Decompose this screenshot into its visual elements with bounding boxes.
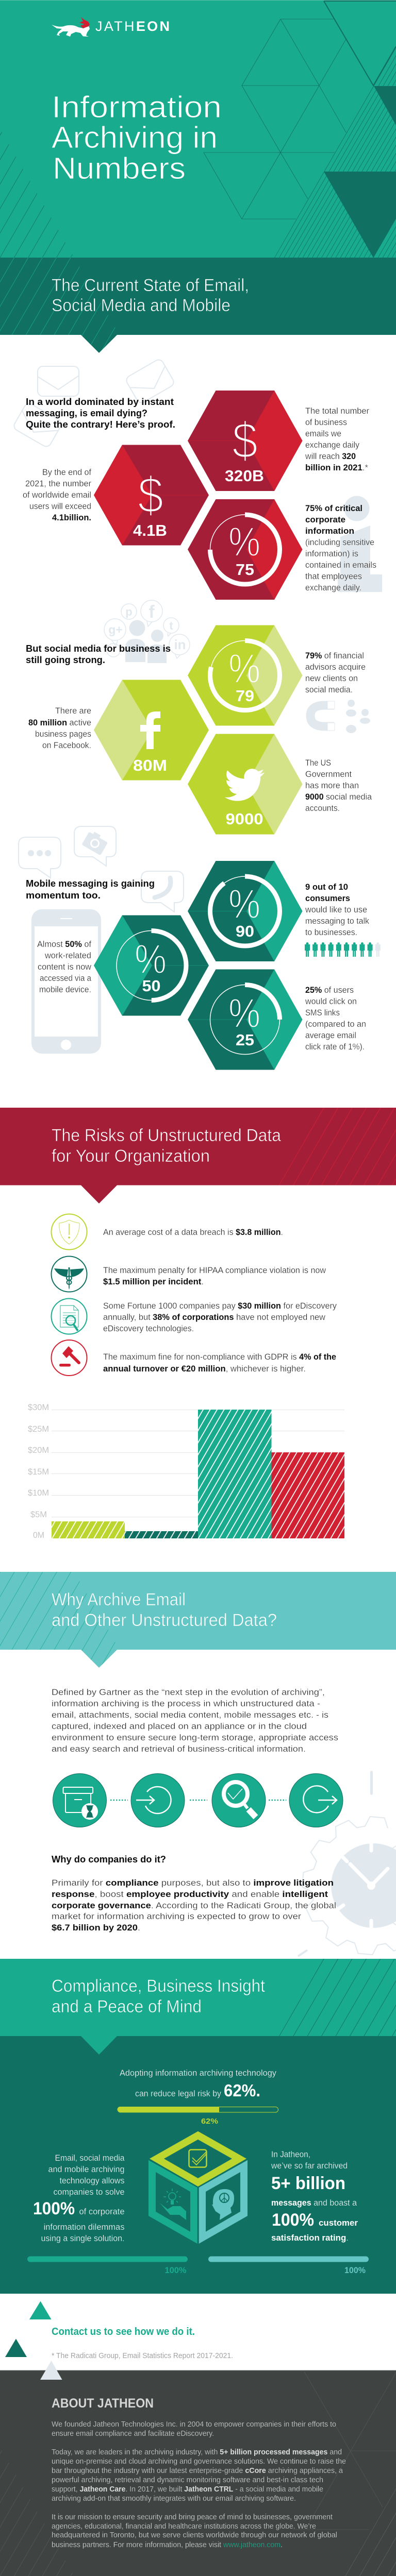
text: 5+ billion: we’ve so far archived [271,2161,348,2171]
chart axis labels: $10M [28,1488,49,1498]
footer text: ensure email compliance and facilitate eDiscovery. [52,2430,214,2438]
text: 100 percent corporate: Email, social media [55,2154,125,2163]
text: 4.1 billion: By the end of [42,468,91,477]
text: GDPR: The maximum fine for non-compliance with GDPR is 4% of the [103,1352,336,1362]
heading: email: messaging, is email dying? [26,408,147,418]
text: legal risk: Adopting information archiving technology [120,2069,277,2078]
text: 9000 accounts: accounts. [305,804,340,813]
text: 50 percent: accessed via a [40,974,92,983]
hexagon: 50 percent: 50 [142,977,161,995]
title: Numbers [53,151,186,185]
hexagon: 80M [94,680,209,780]
text: 9000 accounts: Government [305,770,352,779]
progress bar: right 100 percent [208,2257,369,2275]
background icons: social people: g+ [108,623,123,636]
text: 4.1 billion: 4.1billion. [52,513,91,522]
background icon: magnet and people [310,700,370,733]
text: 9000 accounts: 9000 social media [305,792,372,802]
bar: HIPAA [125,1531,198,1538]
text: 50 percent [37,940,92,994]
text: 75 percent: information) is [305,549,358,558]
section heading: current state: The Current State of Email, [52,276,249,295]
logo: JATHEON [95,19,170,34]
text: 80 million: 80 million active [28,718,91,727]
title: Archiving in [52,121,218,155]
text: 80 million: business pages [35,730,91,739]
text: definition: environment to ensure secure long-term storage, appropriate access [52,1733,338,1742]
footer heading: ABOUT JATHEON [52,2396,154,2411]
text: 4.1 billion [23,468,91,522]
text: why do companies: market for information archiving is expected to grow to over [52,1912,302,1921]
text: 50 percent: work-related [44,951,91,960]
background icons: social people [104,600,190,663]
icon: phone with text [31,909,101,1054]
section heading: compliance [52,1976,266,2016]
text: why do companies: response , boost employee productivity and enable intelligent [52,1890,328,1899]
text: 50 percent: content is now [38,962,91,972]
text: 79 percent [305,651,366,694]
text: 9 out of 10 [305,883,370,937]
icon: cube [148,2131,248,2244]
text: 25 percent: would click on [305,997,357,1006]
text: 75 percent: 75% of critical [305,504,362,513]
progress bar: left 100 percent [27,2257,188,2275]
text: 9 out of 10: would like to use [305,905,367,914]
bar chart [28,1402,344,1540]
hexagon: 79 percent [188,625,302,725]
text: why do companies: Why do companies do it? [52,1854,166,1865]
heading: social: still going strong. [26,655,105,665]
text: 9000 accounts: The US [305,758,331,768]
text: 25 percent [305,986,366,1052]
text: 80 million: There are [55,706,91,716]
icon: archive box [53,1773,106,1827]
icon: magnifier check [212,1773,266,1827]
text: why do companies [52,1854,336,1933]
footer text: support, Jatheon Care. In 2017, we built Jatheon CTRL - a social media and mobile [52,2485,323,2494]
logo [52,17,170,37]
background icons: social people: f [148,602,155,622]
footer panel [0,2370,396,2576]
text: HIPAA: The maximum penalty for HIPAA compliance violation is now [103,1266,326,1275]
text: eDiscovery: eDiscovery technologies. [103,1324,194,1333]
footer text: powerful archiving, retrieval and dynamic monitoring software and best-in class tech [52,2476,323,2484]
bar: data breach [52,1521,125,1538]
icon: inbound arrow [131,1773,185,1827]
text: GDPR [103,1352,336,1374]
hexagon: 25 percent [188,970,302,1070]
icon: caduceus [52,1256,87,1292]
icon: document search [52,1298,87,1334]
heading: social: But social media for business is [26,643,171,654]
hexagon: 4.1B [94,445,209,545]
text: why do companies: corporate governance . According to the Radicati Group, the global [52,1901,336,1910]
section heading: current state: Social Media and Mobile [52,296,230,315]
progress bar: left 100 percent: 100% [165,2265,187,2275]
section band: risks [0,1108,396,1204]
text: 25 percent: 25% of users [305,986,354,995]
section heading: compliance: and a Peace of Mind [52,1997,202,2016]
text: 25 percent: (compared to an [305,1020,366,1029]
text: 5+ billion: 100% [272,2210,314,2230]
text: 320 billion: will reach 320 [305,452,356,461]
text: HIPAA [103,1266,326,1286]
text: 9000 accounts [305,758,372,813]
heading: mobile: Mobile messaging is gaining [26,878,155,889]
chart axis labels: $30M [28,1402,49,1412]
text: 4.1 billion: users will exceed [29,502,91,511]
text: 5+ billion: satisfaction rating. [271,2233,349,2243]
icon: outbound arrow [289,1773,343,1827]
section heading: risks [52,1126,281,1166]
text: 79 percent: 79% of financial [305,651,364,660]
heading: mobile: momentum too. [26,890,101,901]
background icons: chat bubbles [19,826,184,912]
text: legal risk: 62%. [224,2081,260,2100]
footer text: Today, we are leaders in the archiving industry, with 5+ billion processed messages and [52,2448,342,2456]
text: 75 percent: (including sensitive [305,538,374,547]
hexagon: 320B: 320B [225,467,264,485]
hexagon: 4.1B: $ [138,466,163,523]
icon: twitter bird [225,769,265,801]
text: definition: and easy search and retrieval of business-critical information. [52,1744,306,1754]
header triangle lattice [204,19,346,219]
footer text: We founded Jatheon Technologies Inc. in 2004 to empower companies in their efforts to [52,2420,336,2429]
text: 25 percent: average email [305,1031,356,1040]
progress bar: right 100 percent: 100% [344,2265,366,2275]
text: definition [52,1688,338,1754]
text: definition: email, attachments, social media content, mobile messages etc. - is [52,1710,328,1720]
icon: head with peace sign [212,2189,234,2220]
text: 100 percent corporate [33,2154,125,2243]
icon: bulb and hand [160,2189,186,2220]
section band: why archive [0,1572,396,1668]
icon: gavel [52,1340,87,1376]
text: 100 percent corporate: companies to solve [54,2188,125,2197]
section band: compliance [0,1959,396,2055]
bar: GDPR [271,1452,344,1538]
text: 75 percent: information [305,527,354,536]
text: definition: Defined by Gartner as the “next step in the evolution of archiving”, [52,1688,325,1697]
hexagon: 25 percent: % [228,990,260,1036]
text: 75 percent [305,504,376,592]
progress bar: 62 percent: 62% [201,2117,218,2126]
footer text: archiving add-on that smoothly integrates with our email archiving software. [52,2495,296,2503]
decorative triangles [5,2301,62,2380]
icon row: 9 of 10 people [305,942,381,957]
text: 80 million [28,706,91,750]
text: 9 out of 10: to businesses. [305,928,357,937]
section heading: risks: The Risks of Unstructured Data [52,1126,281,1145]
chart axis labels: $5M [30,1510,47,1519]
text: eDiscovery: annually, but 38% of corporations have not employed new [103,1313,325,1322]
hexagon: 4.1B: 4.1B [133,521,167,539]
text: 9000 accounts: has more than [305,781,359,790]
hexagon: 90 percent: % [228,881,260,927]
text: 320 billion [305,406,370,472]
footer text: bar throughout the industry with our latest enterprise-grade cCore archiving appliances, a [52,2467,343,2475]
panel: compliance dark background [0,2036,396,2294]
footer text: headquartered in Toronto, but we serve clients worldwide through our network of global [52,2531,337,2539]
text: GDPR: annual turnover or €20 million, whichever is higher. [103,1364,306,1374]
text: 100 percent corporate: technology allows [60,2176,125,2185]
hexagon: 50 percent [94,915,209,1016]
progress bar: 62 percent [118,2107,278,2126]
text: 5+ billion: In Jatheon, [271,2150,310,2159]
chart axis labels: $20M [28,1445,49,1455]
section band: current state [0,258,396,353]
text: 100 percent corporate: 100% [33,2199,75,2218]
text: 9 out of 10: messaging to talk [305,917,370,926]
hexagon: 79 percent: 79 [236,687,254,705]
text: 79 percent: social media. [305,685,353,694]
hexagon: 90 percent [188,861,302,961]
text: 75 percent: contained in emails [305,561,376,570]
footer text [52,2420,346,2549]
background icons: social people: in [174,637,186,652]
text: legal risk [120,2069,277,2100]
background icon: clock gear [298,1771,396,1956]
text: 320 billion: of business [305,418,347,427]
background icon: info [338,496,382,592]
text: 320 billion: billion in 2021.* [305,463,369,472]
text: 320 billion: emails we [305,429,341,438]
footer text: business partners. For more information, please visit www.jatheon.com. [52,2541,283,2549]
hexagon: 320B [188,391,302,491]
text: 5+ billion: 5+ billion [271,2174,345,2193]
text: 9 out of 10: consumers [305,894,350,903]
text: HIPAA: $1.5 million per incident. [103,1277,204,1286]
section heading: risks: for Your Organization [52,1146,210,1166]
chart axis labels: 0M [33,1530,44,1540]
text: why do companies: $6.7 billion by 2020 . [52,1923,140,1933]
title: Information [52,90,222,124]
dotted connectors [110,1800,286,1801]
hexagon: 25 percent: 25 [236,1031,254,1049]
background icons: social people: p [125,605,133,618]
text: definition: captured, indexed and placed on an appliance or in the cloud [52,1722,307,1731]
text: 75 percent: exchange daily. [305,583,361,592]
text: 79 percent: advisors acquire [305,663,366,672]
text: 75 percent: that employees [305,572,362,581]
heading: mobile [26,878,155,901]
process row: circles [53,1773,343,1827]
text: 5+ billion [271,2150,358,2243]
icon: check [189,2149,207,2167]
text: definition: information archiving is the process in which unstructured data - [52,1699,320,1708]
section heading: why archive: and Other Unstructured Data? [52,1611,277,1630]
text: 4.1 billion: of worldwide email [23,490,91,500]
chart axis labels: $25M [28,1424,49,1434]
text: 100 percent corporate: and mobile archiving [48,2165,125,2174]
text: 5+ billion: customer [319,2218,358,2228]
text: legal risk: can reduce legal risk by [135,2089,222,2098]
hexagon: 9000 [188,734,302,835]
hexagon: 9000: 9000 [226,810,263,828]
hexagon: 80M: 80M [133,756,167,774]
text: 9 out of 10: 9 out of 10 [305,883,348,892]
hexagon: 90 percent: 90 [236,922,254,940]
section heading: why archive: Why Archive Email [52,1590,186,1609]
hexagon: 75 percent [188,499,302,600]
text: eDiscovery: Some Fortune 1000 companies pay $30 million for eDiscovery [103,1301,337,1311]
text: 320 billion: The total number [305,406,370,416]
text: 100 percent corporate: information dilemmas [43,2223,125,2232]
text: 50 percent: Almost 50% of [37,940,91,949]
title [52,90,222,185]
chart axis labels [28,1402,49,1540]
heading: social [26,643,171,665]
text: 25 percent: click rate of 1%). [305,1042,365,1052]
heading: email: In a world dominated by instant [26,397,174,407]
text: 320 billion: exchange daily [305,440,360,450]
heading: email [26,397,175,430]
text: 4.1 billion: 2021, the number [25,479,91,488]
text: 5+ billion: messages and boast a [271,2198,357,2208]
icon: facebook f [140,711,160,749]
text: why do companies: Primarily for compliance purposes, but also to improve litigation [52,1878,334,1888]
section heading: why archive [52,1590,277,1630]
text: 100 percent corporate: using a single solution. [41,2234,125,2243]
hexagon: 50 percent: % [135,936,167,982]
icon: shield [52,1214,87,1250]
text: eDiscovery [103,1301,337,1333]
text: 75 percent: corporate [305,515,345,524]
footer text: It is our mission to ensure security and bring peace of mind to businesses, government [52,2513,333,2521]
footer text: unique on-premise and cloud archiving and governance solutions. We continue to raise the [52,2458,346,2466]
text: 100 percent corporate: of corporate [79,2207,125,2216]
bar: eDiscovery [198,1410,271,1538]
hexagon: 75 percent: % [228,519,260,565]
section heading: current state [52,276,249,315]
hexagon: 75 percent: 75 [236,561,254,579]
chart axis labels: $15M [28,1467,49,1477]
call to action: Contact us to see how we do it. [52,2326,195,2337]
section heading: compliance: Compliance, Business Insight [52,1976,266,1996]
source note: * The Radicati Group, Email Statistics Report 2017-2021. [52,2351,233,2360]
text: 79 percent: new clients on [305,674,358,683]
header panel [0,0,396,258]
text: 80 million: on Facebook. [42,741,91,750]
text: 50 percent: mobile device. [39,985,91,994]
footer text: agencies, educational, financial and healthcare institutions across the globe. We’re [52,2522,316,2531]
background icons: envelopes [12,358,175,448]
background icons: social people: t [169,619,173,632]
hexagon: 320B: $ [232,412,258,469]
hexagon: 79 percent: % [228,646,260,691]
text: 25 percent: SMS links [305,1008,340,1018]
text: data breach: An average cost of a data breach is $3.8 million. [103,1228,283,1237]
heading: email: Quite the contrary! Here’s proof. [26,419,175,430]
